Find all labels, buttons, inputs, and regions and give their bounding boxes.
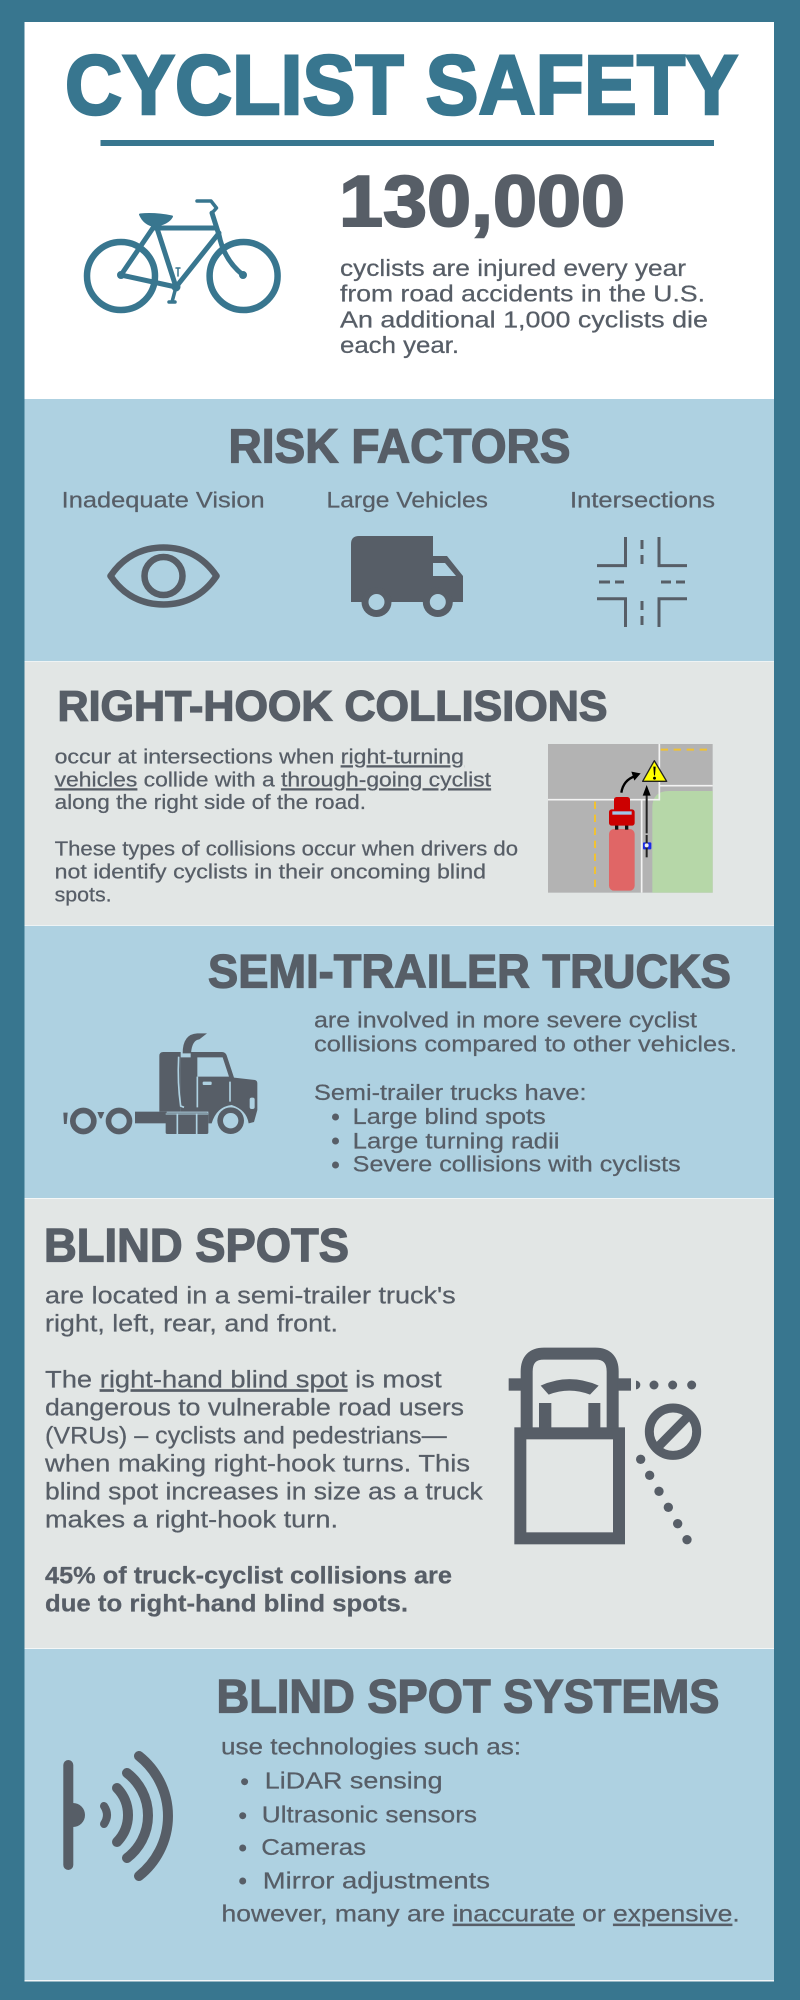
title: CYCLIST SAFETY — [65, 38, 738, 132]
text block: injury statistic — [340, 255, 708, 358]
text block: definition: spots. — [55, 883, 112, 906]
diagram: right-hook intersection — [548, 744, 713, 893]
icon: eye — [110, 548, 216, 604]
text block: severity: are involved in more severe cyclist — [314, 1007, 697, 1032]
text block: technologies: use technologies such as: — [221, 1733, 521, 1759]
text block: definition — [55, 745, 518, 906]
bullet list: Cameras — [261, 1834, 366, 1860]
text block: location: are located in a semi-trailer truck's — [45, 1282, 456, 1309]
bullet list: LiDAR sensing — [265, 1767, 443, 1793]
icon: delivery truck — [351, 536, 463, 617]
text block: definition: vehicles collide with a through-going cyclist — [55, 768, 491, 791]
icon: truck top view with blind spot — [509, 1354, 697, 1544]
text block: right-hand blind spot: dangerous to vulnerable road users — [45, 1394, 464, 1421]
bullet list: Ultrasonic sensors — [262, 1801, 477, 1827]
text block: severity — [314, 1007, 737, 1177]
icon: bicycle — [87, 201, 278, 310]
text block: location: right, left, rear, and front. — [45, 1310, 338, 1337]
text block: 45 percent statistic: 45% of truck-cyclist collisions are — [45, 1562, 452, 1589]
heading: BLIND SPOTS — [44, 1219, 349, 1272]
bullet list: Large turning radii — [353, 1128, 560, 1153]
icon: semi truck — [63, 1033, 257, 1134]
text block: right-hand blind spot: The right-hand blind spot is most — [45, 1366, 442, 1393]
text block: injury statistic: each year. — [340, 332, 459, 358]
bullet list: Mirror adjustments — [263, 1867, 490, 1893]
panel: risk factors — [24, 399, 774, 661]
text block: definition: occur at intersections when right-turning — [55, 745, 464, 768]
heading: BLIND SPOT SYSTEMS — [216, 1670, 720, 1723]
text block: right-hand blind spot: makes a right-hook turn. — [45, 1507, 338, 1534]
icon: intersection — [597, 537, 687, 627]
panel: semi-trailer trucks — [24, 925, 774, 1198]
text block: definition: along the right side of the road. — [55, 791, 366, 814]
text block: location — [45, 1282, 456, 1337]
heading: RISK FACTORS — [228, 420, 570, 474]
text block: right-hand blind spot: (VRUs) – cyclists and pedestrians— — [45, 1422, 447, 1449]
heading: SEMI-TRAILER TRUCKS — [208, 945, 731, 998]
panel: blind spots — [24, 1198, 774, 1648]
text block: right-hand blind spot: when making right-hook turns. This — [44, 1451, 470, 1478]
heading: RIGHT-HOOK COLLISIONS — [58, 682, 608, 730]
label: large vehicles: Large Vehicles — [326, 488, 488, 512]
text block: definition: These types of collisions occur when drivers do — [55, 837, 518, 860]
text block: right-hand blind spot — [44, 1366, 484, 1534]
text block: right-hand blind spot: blind spot increases in size as a truck — [45, 1479, 484, 1506]
label: inadequate vision: Inadequate Vision — [62, 488, 265, 512]
big number: 130,000 — [339, 162, 625, 242]
text block: technologies: however, many are inaccurate or expensive . — [222, 1901, 740, 1927]
text block: injury statistic: from road accidents in the U.S. — [340, 281, 705, 307]
text block: 45 percent statistic — [45, 1562, 452, 1617]
bullet list — [332, 1104, 681, 1177]
bullet list: Large blind spots — [353, 1104, 546, 1129]
label: intersections: Intersections — [570, 488, 715, 512]
bullet list — [239, 1767, 490, 1893]
icon: sensor waves — [68, 1756, 168, 1876]
panel: blind spot systems — [24, 1648, 774, 1980]
panel: right-hook collisions — [24, 661, 774, 925]
text block: definition: not identify cyclists in their oncoming blind — [55, 860, 486, 883]
text block: 45 percent statistic: due to right-hand blind spots. — [45, 1590, 408, 1617]
text block: technologies — [221, 1733, 740, 1927]
text block: severity: collisions compared to other vehicles. — [314, 1032, 737, 1057]
panel: header — [24, 22, 774, 399]
bullet list: Severe collisions with cyclists — [353, 1152, 681, 1177]
title rule — [100, 140, 714, 146]
text block: injury statistic: An additional 1,000 cyclists die — [340, 307, 708, 333]
text block: severity: Semi-trailer trucks have: — [314, 1080, 586, 1105]
text block: injury statistic: cyclists are injured every year — [340, 255, 686, 281]
